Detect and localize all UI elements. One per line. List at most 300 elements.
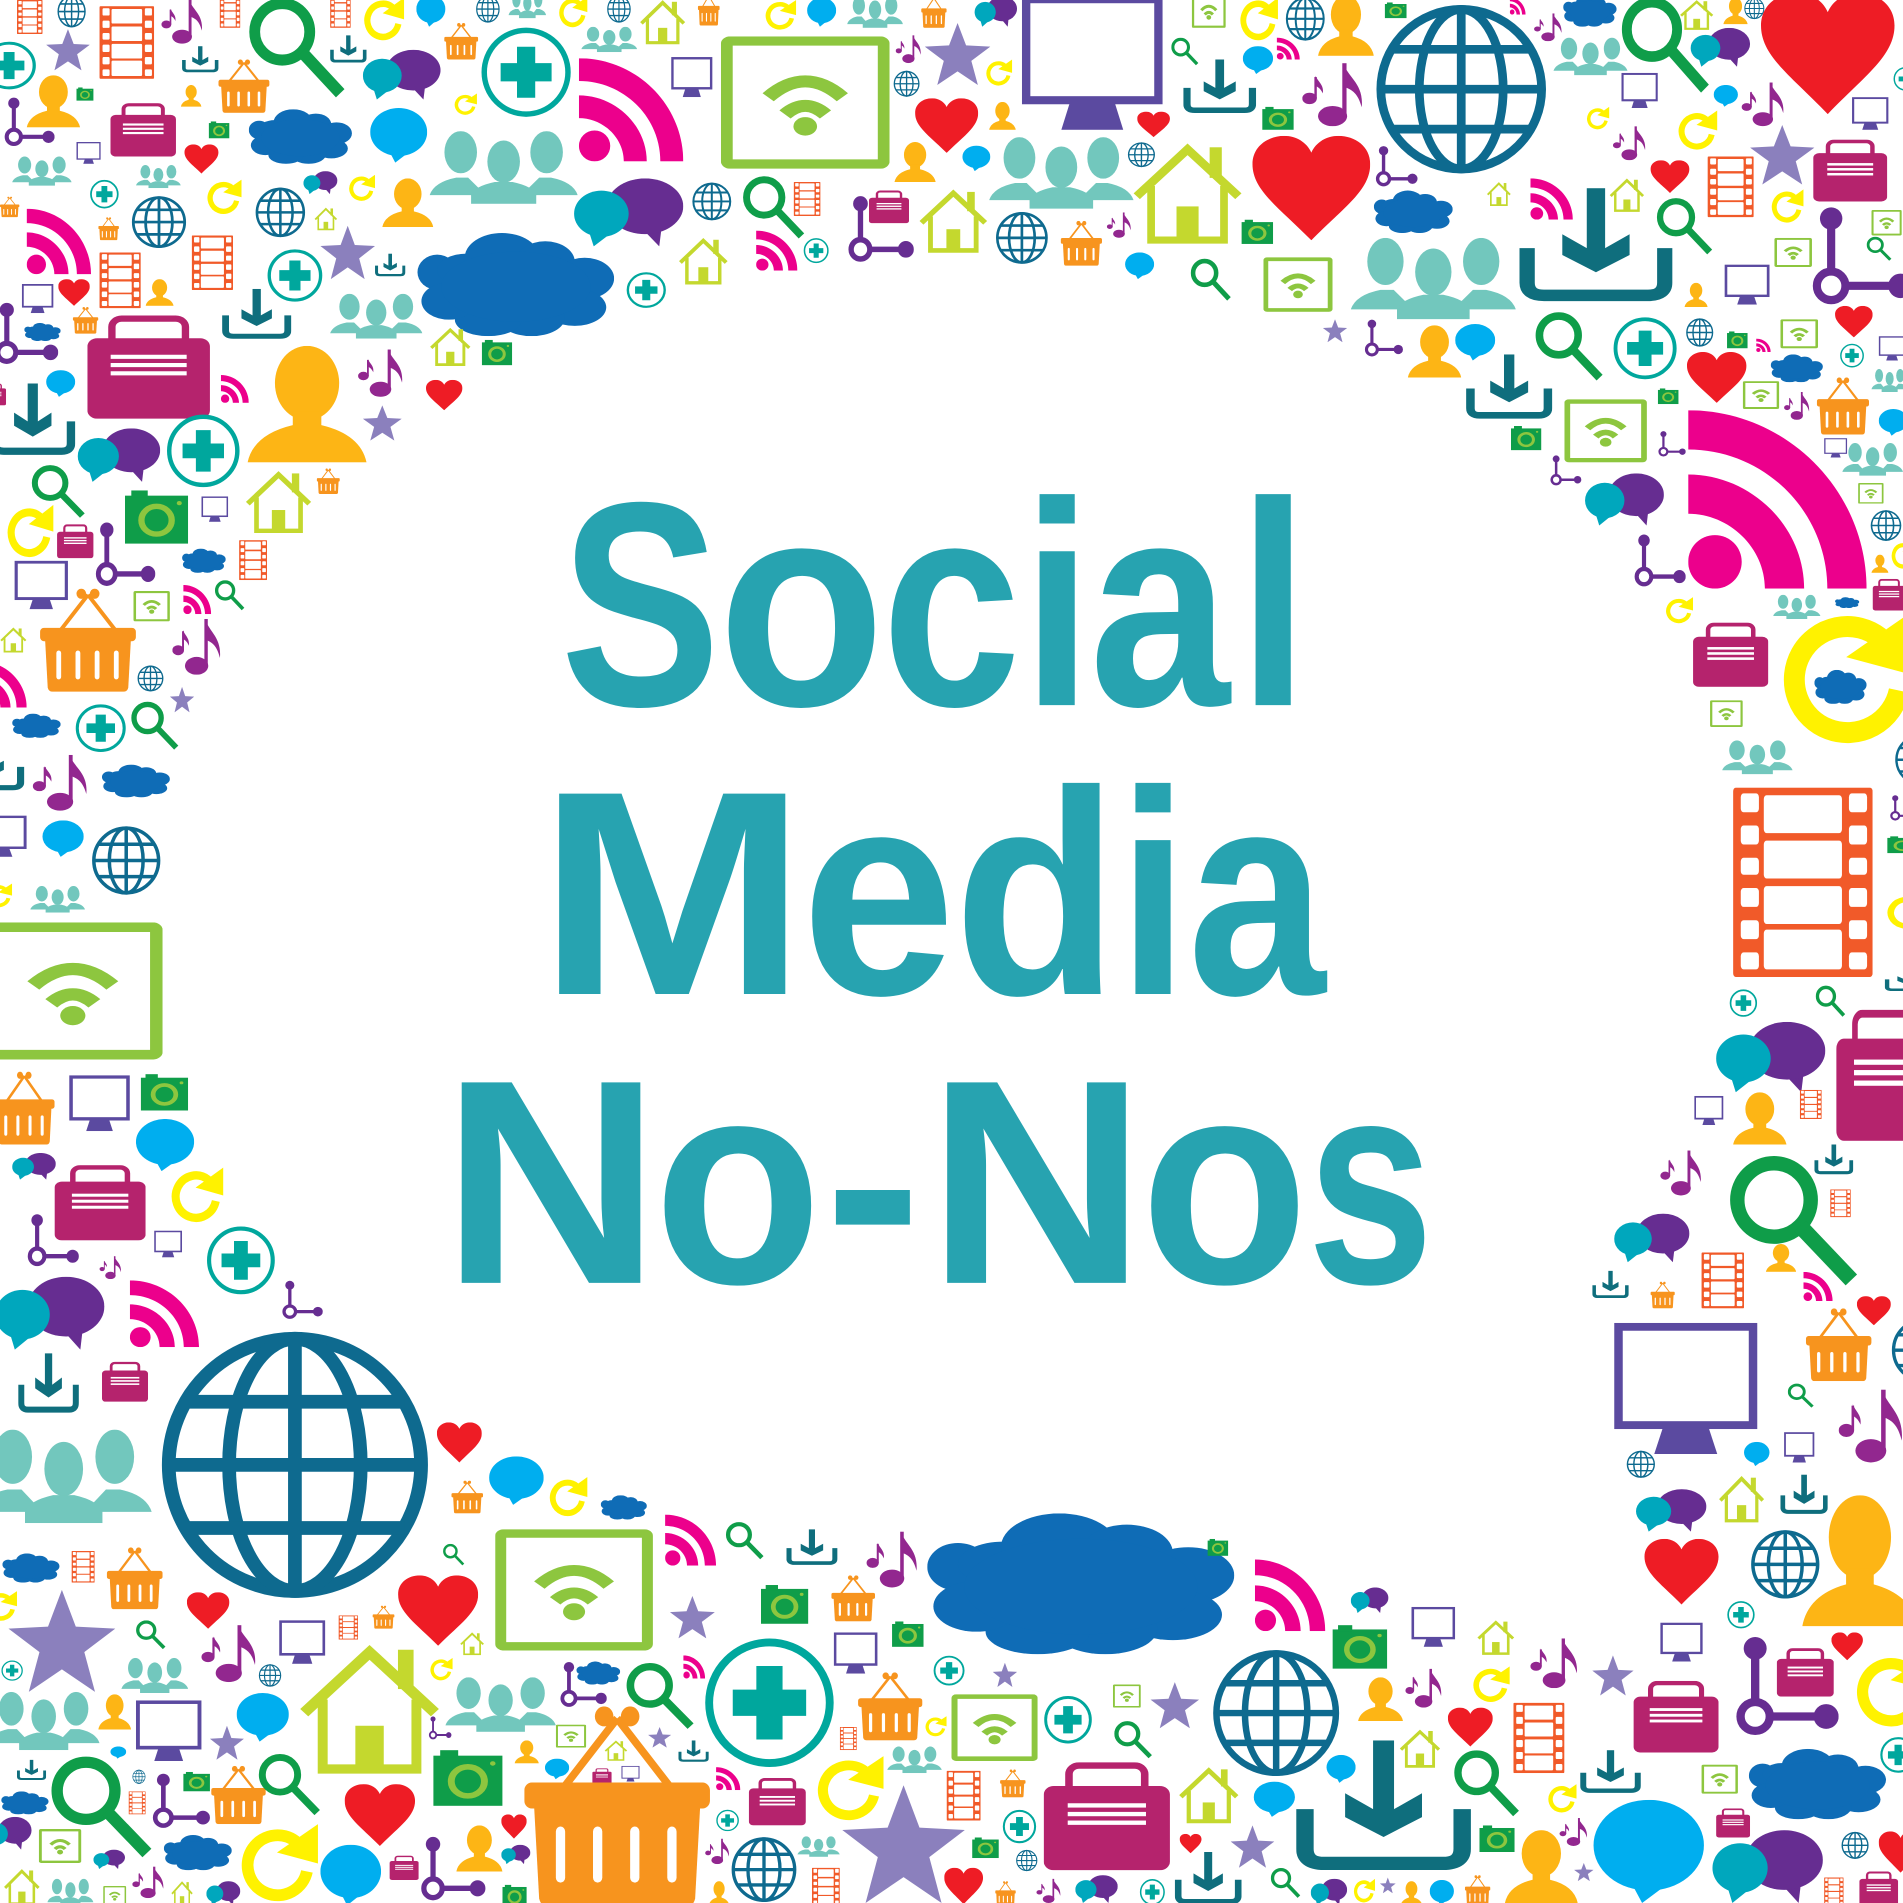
icon: music bbox=[132, 1867, 163, 1898]
icon: film bbox=[129, 1791, 146, 1814]
icon: plus bbox=[2, 1661, 22, 1680]
icon: house bbox=[248, 473, 309, 531]
icon: network bbox=[0, 303, 58, 361]
icon: cloud bbox=[102, 765, 170, 797]
icon: magnifier bbox=[1539, 316, 1600, 378]
icon: magnifier bbox=[1173, 39, 1197, 64]
icon: wifi bbox=[1859, 484, 1883, 503]
icon: heart bbox=[1137, 112, 1170, 137]
icon: network bbox=[284, 1281, 323, 1317]
icon: people bbox=[1773, 595, 1820, 619]
icon: heart bbox=[501, 1814, 527, 1839]
icon: bag bbox=[87, 319, 210, 419]
icon: person bbox=[1408, 325, 1461, 377]
icon: heart bbox=[915, 98, 978, 153]
icon: wifi bbox=[1782, 320, 1817, 347]
icon: monitor bbox=[1825, 439, 1846, 458]
icon: star bbox=[210, 1726, 244, 1760]
icon: heart bbox=[187, 1592, 229, 1629]
icon: plus bbox=[935, 1657, 964, 1685]
icon: cloud bbox=[601, 1495, 647, 1519]
icon: music bbox=[867, 1532, 917, 1587]
icon: bag bbox=[102, 1363, 148, 1402]
icon: bubble bbox=[1594, 1800, 1704, 1903]
icon: wifi bbox=[1711, 701, 1742, 726]
icon: globe bbox=[94, 828, 159, 893]
icon: refresh bbox=[927, 1716, 947, 1735]
icon: plus bbox=[628, 273, 665, 307]
icon: download bbox=[789, 1529, 835, 1563]
icon: person bbox=[515, 1740, 539, 1763]
icon: network bbox=[1552, 455, 1581, 484]
icon: music bbox=[358, 350, 402, 397]
icon: house bbox=[315, 208, 336, 230]
icon: monitor bbox=[1623, 74, 1657, 108]
icon: plus bbox=[1841, 344, 1863, 367]
icon: rss bbox=[1530, 178, 1573, 220]
icon: refresh bbox=[1774, 189, 1803, 220]
title line: No-Nos: o bbox=[1140, 1019, 1309, 1345]
panel: right icon cluster bbox=[1594, 607, 1903, 1604]
icon: person bbox=[146, 279, 174, 306]
icon: globe bbox=[1894, 1319, 1903, 1381]
icon: music bbox=[896, 35, 921, 63]
icon: film bbox=[1830, 1189, 1851, 1217]
icon: camera bbox=[209, 121, 229, 138]
icon: camera bbox=[141, 1074, 188, 1110]
icon: refresh bbox=[1682, 110, 1717, 147]
icon: people bbox=[1871, 369, 1903, 392]
icon: music bbox=[33, 755, 87, 811]
icon: basket bbox=[107, 1547, 163, 1609]
icon: bubble bbox=[489, 1456, 544, 1505]
title line: Social: a bbox=[1089, 441, 1232, 767]
icon: film bbox=[1824, 1878, 1844, 1903]
icon: download bbox=[1527, 188, 1665, 295]
icon: heart bbox=[1252, 136, 1370, 240]
icon: refresh bbox=[1863, 1653, 1903, 1721]
icon: download bbox=[184, 46, 217, 71]
icon: star bbox=[1592, 1655, 1634, 1695]
icon: rss bbox=[716, 1767, 740, 1790]
icon: basket bbox=[1061, 221, 1102, 266]
icon: refresh bbox=[823, 1756, 884, 1815]
icon: person bbox=[181, 85, 201, 107]
icon: basket bbox=[373, 1606, 394, 1629]
icon: film bbox=[192, 235, 233, 290]
icon: monitor bbox=[155, 1231, 181, 1257]
icon: cloud bbox=[1563, 0, 1617, 27]
title line: Social: o bbox=[718, 441, 885, 767]
icon: basket bbox=[995, 1881, 1016, 1903]
icon: network bbox=[155, 1774, 210, 1826]
icon: person bbox=[1723, 0, 1748, 24]
icon: download bbox=[332, 35, 365, 61]
icon: magnifier bbox=[728, 1524, 762, 1558]
icon: globe bbox=[1627, 1451, 1654, 1477]
icon: person bbox=[989, 102, 1016, 130]
icon: network bbox=[98, 523, 155, 583]
icon: refresh bbox=[367, 0, 404, 37]
icon: chat bbox=[1311, 1879, 1347, 1903]
icon: refresh bbox=[11, 505, 53, 553]
icon: magnifier bbox=[747, 180, 801, 236]
title line: Media: a bbox=[1188, 730, 1327, 1056]
icon: plus bbox=[0, 43, 34, 88]
icon: refresh bbox=[768, 0, 796, 27]
icon: magnifier bbox=[1116, 1723, 1150, 1757]
icon: film bbox=[840, 1727, 857, 1750]
icon: refresh bbox=[0, 1591, 17, 1618]
icon: basket bbox=[858, 1672, 922, 1740]
icon: globe bbox=[58, 0, 85, 27]
icon: people bbox=[887, 1746, 942, 1773]
icon: person bbox=[1685, 283, 1708, 307]
icon: wifi bbox=[135, 592, 169, 620]
icon: film bbox=[1800, 1090, 1822, 1119]
icon: cloud bbox=[1835, 597, 1859, 608]
icon: globe bbox=[1381, 9, 1542, 169]
icon: refresh bbox=[248, 1824, 318, 1895]
icon: house bbox=[1479, 1622, 1513, 1654]
icon: heart bbox=[58, 279, 90, 306]
icon: plus bbox=[1728, 1602, 1754, 1628]
icon: bag bbox=[55, 1167, 146, 1240]
icon: magnifier bbox=[217, 582, 243, 609]
icon: network bbox=[1637, 535, 1686, 584]
icon: camera bbox=[1727, 331, 1748, 348]
icon: basket bbox=[831, 1575, 875, 1621]
icon: wifi bbox=[0, 927, 156, 1055]
icon: music bbox=[1784, 392, 1809, 420]
icon: camera bbox=[125, 490, 188, 544]
icon: cloud bbox=[249, 109, 352, 164]
icon: camera bbox=[433, 1750, 502, 1806]
icon: globe bbox=[1216, 1653, 1336, 1773]
icon: basket bbox=[451, 1481, 483, 1513]
icon: chat bbox=[1716, 1022, 1825, 1092]
icon: refresh bbox=[1551, 1784, 1577, 1810]
icon: rss bbox=[579, 58, 683, 161]
icon: wifi bbox=[1193, 0, 1225, 27]
icon: film bbox=[1513, 1703, 1564, 1773]
icon: star bbox=[1231, 1825, 1274, 1868]
icon: plus bbox=[1141, 1880, 1164, 1903]
title line: No-Nos: N bbox=[927, 1019, 1146, 1345]
icon: film bbox=[1708, 157, 1754, 217]
icon: bubble bbox=[1254, 1782, 1295, 1817]
icon: chat bbox=[1585, 473, 1664, 526]
icon: plus bbox=[709, 1642, 830, 1763]
icon: basket bbox=[444, 23, 478, 59]
icon: basket bbox=[524, 1706, 710, 1903]
icon: globe bbox=[1745, 0, 1764, 19]
icon: globe bbox=[693, 184, 730, 219]
icon: film bbox=[239, 540, 267, 580]
panel: top-centre icon cluster bbox=[641, 0, 1017, 283]
icon: rss bbox=[0, 661, 27, 708]
icon: star bbox=[1151, 1682, 1199, 1728]
icon: plus bbox=[1731, 990, 1756, 1016]
icon: person bbox=[1318, 0, 1374, 56]
icon: bag bbox=[1836, 1014, 1903, 1141]
icon: bubble bbox=[110, 1746, 126, 1759]
icon: globe bbox=[169, 1339, 421, 1591]
icon: basket bbox=[1000, 1769, 1026, 1797]
icon: music bbox=[1405, 1669, 1441, 1708]
icon: monitor bbox=[1695, 1097, 1723, 1125]
icon: heart bbox=[345, 1784, 415, 1846]
icon: magnifier bbox=[1458, 1754, 1516, 1813]
icon: camera bbox=[1511, 426, 1541, 450]
icon: bubble bbox=[1879, 409, 1903, 436]
icon: monitor bbox=[202, 497, 227, 522]
icon: house bbox=[641, 2, 684, 43]
icon: basket bbox=[0, 1072, 55, 1144]
icon: bag bbox=[869, 192, 909, 223]
title line: No-Nos: s bbox=[1307, 1019, 1434, 1345]
icon: basket bbox=[1817, 377, 1869, 434]
icon: plus bbox=[1046, 1697, 1090, 1742]
icon: refresh bbox=[0, 884, 12, 905]
icon: network bbox=[1660, 431, 1686, 455]
icon: globe bbox=[1753, 1532, 1818, 1597]
icon: magnifier bbox=[1193, 261, 1229, 299]
icon: network bbox=[1378, 146, 1418, 185]
icon: house bbox=[921, 192, 985, 251]
icon: star bbox=[1750, 125, 1814, 184]
icon: cloud bbox=[12, 714, 61, 738]
icon: person bbox=[98, 1694, 131, 1729]
icon: monitor bbox=[23, 285, 52, 313]
icon: person bbox=[27, 75, 80, 127]
icon: people bbox=[121, 1658, 188, 1693]
icon: globe bbox=[1687, 319, 1713, 346]
icon: basket bbox=[921, 0, 947, 28]
icon: wifi bbox=[1703, 1766, 1737, 1793]
icon: cloud bbox=[1749, 1749, 1886, 1819]
icon: people bbox=[445, 1677, 556, 1732]
icon: people bbox=[1553, 38, 1628, 75]
icon: camera bbox=[1887, 836, 1903, 853]
icon: film bbox=[1702, 1252, 1744, 1308]
icon: bubble bbox=[807, 0, 836, 27]
title line: Media: i bbox=[1118, 730, 1189, 1056]
icon: people bbox=[509, 0, 546, 18]
icon: bubble bbox=[237, 1693, 289, 1742]
icon: heart bbox=[437, 1422, 482, 1462]
icon: globe bbox=[133, 1770, 145, 1783]
icon: wifi bbox=[727, 41, 884, 164]
panel: bottom-right icon cluster bbox=[1305, 1495, 1903, 1903]
icon: chat bbox=[303, 171, 337, 194]
icon: globe bbox=[894, 71, 919, 96]
icon: person bbox=[248, 346, 367, 462]
icon: refresh bbox=[1893, 541, 1903, 566]
panel: left icon cluster bbox=[0, 523, 421, 1591]
icon: person bbox=[709, 1881, 729, 1903]
icon: music bbox=[1839, 1390, 1902, 1462]
icon: camera bbox=[761, 1585, 808, 1624]
icon: house bbox=[1720, 1478, 1763, 1521]
icon: people bbox=[47, 1879, 93, 1903]
icon: bubble bbox=[42, 820, 84, 857]
icon: bag bbox=[1873, 580, 1903, 610]
icon: rss bbox=[221, 375, 249, 403]
icon: basket bbox=[1465, 1875, 1490, 1903]
icon: refresh bbox=[561, 0, 587, 25]
icon: music bbox=[1560, 1818, 1587, 1846]
icon: people bbox=[0, 1692, 100, 1750]
icon: camera bbox=[482, 340, 512, 365]
icon: star bbox=[925, 23, 990, 85]
icon: monitor bbox=[1880, 337, 1903, 360]
icon: bag bbox=[1044, 1765, 1170, 1870]
icon: download bbox=[18, 1760, 45, 1779]
icon: monitor bbox=[16, 562, 66, 609]
icon: basket bbox=[1806, 1308, 1871, 1381]
icon: wifi bbox=[1266, 259, 1330, 310]
icon: star bbox=[842, 1785, 965, 1903]
panel: bottom-centre icon cluster bbox=[524, 1513, 1634, 1903]
icon: house bbox=[461, 1633, 483, 1654]
icon: film bbox=[339, 1615, 358, 1640]
icon: basket bbox=[40, 589, 136, 692]
icon: person bbox=[1733, 1092, 1786, 1144]
icon: magnifier bbox=[138, 1622, 164, 1648]
title line: Media: M bbox=[538, 730, 807, 1056]
icon: bag bbox=[1777, 1650, 1834, 1697]
panel: top-right icon cluster bbox=[988, 0, 1903, 621]
icon: people bbox=[847, 0, 903, 28]
icon: rss bbox=[183, 585, 211, 614]
icon: plus bbox=[209, 1229, 273, 1292]
icon: bubble bbox=[1744, 1442, 1769, 1466]
icon: wifi bbox=[501, 1533, 647, 1646]
icon: plus bbox=[1894, 68, 1903, 90]
icon: globe bbox=[608, 0, 630, 22]
icon: bubble bbox=[46, 370, 75, 397]
icon: basket bbox=[1651, 1282, 1675, 1308]
icon: house bbox=[680, 240, 726, 283]
icon: cloud bbox=[24, 323, 61, 341]
icon: magnifier bbox=[1817, 987, 1844, 1015]
icon: bag bbox=[57, 525, 93, 558]
icon: network bbox=[30, 1214, 79, 1264]
icon: network bbox=[1817, 207, 1903, 300]
icon: magnifier bbox=[255, 4, 340, 93]
icon: refresh bbox=[432, 1658, 453, 1679]
icon: basket bbox=[698, 0, 720, 25]
icon: person bbox=[456, 1825, 502, 1871]
icon: star bbox=[1380, 1878, 1396, 1893]
icon: camera bbox=[1262, 107, 1294, 130]
icon: globe bbox=[133, 198, 185, 247]
icon: bag bbox=[1634, 1683, 1719, 1753]
icon: magnifier bbox=[134, 704, 176, 748]
icon: refresh bbox=[1891, 894, 1903, 926]
icon: download bbox=[1783, 1475, 1825, 1512]
icon: download bbox=[1816, 1144, 1851, 1173]
icon: camera bbox=[1658, 388, 1678, 404]
icon: cloud bbox=[576, 1661, 620, 1685]
icon: monitor bbox=[71, 1077, 128, 1131]
icon: globe bbox=[1871, 511, 1901, 540]
icon: camera bbox=[1385, 2, 1407, 18]
icon: refresh bbox=[1356, 1879, 1375, 1901]
icon: people bbox=[1842, 443, 1903, 476]
icon: chat bbox=[206, 1881, 240, 1903]
icon: bag bbox=[1693, 625, 1768, 687]
icon: bubble bbox=[136, 1119, 194, 1171]
icon: bag bbox=[0, 384, 6, 405]
icon: music bbox=[1613, 126, 1645, 160]
icon: person bbox=[1401, 1881, 1422, 1903]
icon: house bbox=[1137, 147, 1238, 241]
icon: heart bbox=[1687, 352, 1746, 403]
icon: film bbox=[100, 6, 154, 79]
icon: basket bbox=[317, 468, 340, 494]
icon: music bbox=[705, 1839, 729, 1864]
icon: heart bbox=[1180, 1834, 1202, 1853]
icon: monitor bbox=[672, 58, 711, 97]
icon: heart bbox=[184, 144, 218, 174]
icon: people bbox=[330, 294, 422, 339]
icon: chat bbox=[975, 0, 1017, 27]
icon: camera bbox=[1333, 1625, 1387, 1669]
icon: star bbox=[170, 687, 194, 712]
icon: music bbox=[100, 1256, 121, 1279]
icon: globe bbox=[138, 666, 163, 691]
icon: bag bbox=[1813, 141, 1887, 201]
icon: wifi bbox=[557, 1725, 585, 1747]
icon: plus bbox=[1004, 1811, 1035, 1842]
icon: download bbox=[377, 254, 404, 275]
icon: camera bbox=[972, 1837, 999, 1858]
icon: camera bbox=[1208, 1539, 1228, 1556]
icon: bubble bbox=[545, 1759, 569, 1779]
icon: film bbox=[794, 182, 820, 216]
icon: house bbox=[431, 329, 469, 365]
icon: chat bbox=[1691, 28, 1750, 67]
icon: people bbox=[136, 165, 181, 188]
icon: wifi bbox=[1567, 401, 1644, 460]
icon: cloud bbox=[927, 1513, 1234, 1654]
icon: house bbox=[1681, 1, 1712, 29]
icon: monitor bbox=[1662, 1624, 1701, 1661]
icon: download bbox=[0, 740, 21, 788]
icon: chat bbox=[93, 1850, 125, 1869]
icon: wifi bbox=[1114, 1685, 1140, 1707]
icon: basket bbox=[98, 217, 119, 240]
icon: magnifier bbox=[1737, 1163, 1851, 1280]
icon: plus bbox=[91, 181, 118, 208]
icon: heart bbox=[1831, 1632, 1863, 1660]
title bbox=[441, 441, 1434, 1345]
icon: globe bbox=[259, 1665, 281, 1686]
icon: people bbox=[581, 27, 637, 52]
icon: person bbox=[382, 178, 433, 227]
icon: globe bbox=[733, 1839, 795, 1900]
icon: download bbox=[1594, 1271, 1627, 1297]
icon: cloud bbox=[2, 1553, 59, 1583]
panel: top-left icon cluster bbox=[0, 0, 683, 553]
icon: camera bbox=[76, 87, 93, 101]
icon: magnifier bbox=[1868, 238, 1890, 260]
icon: star bbox=[648, 1727, 671, 1748]
icon: people bbox=[797, 1836, 840, 1857]
icon: cloud bbox=[1, 1791, 49, 1814]
